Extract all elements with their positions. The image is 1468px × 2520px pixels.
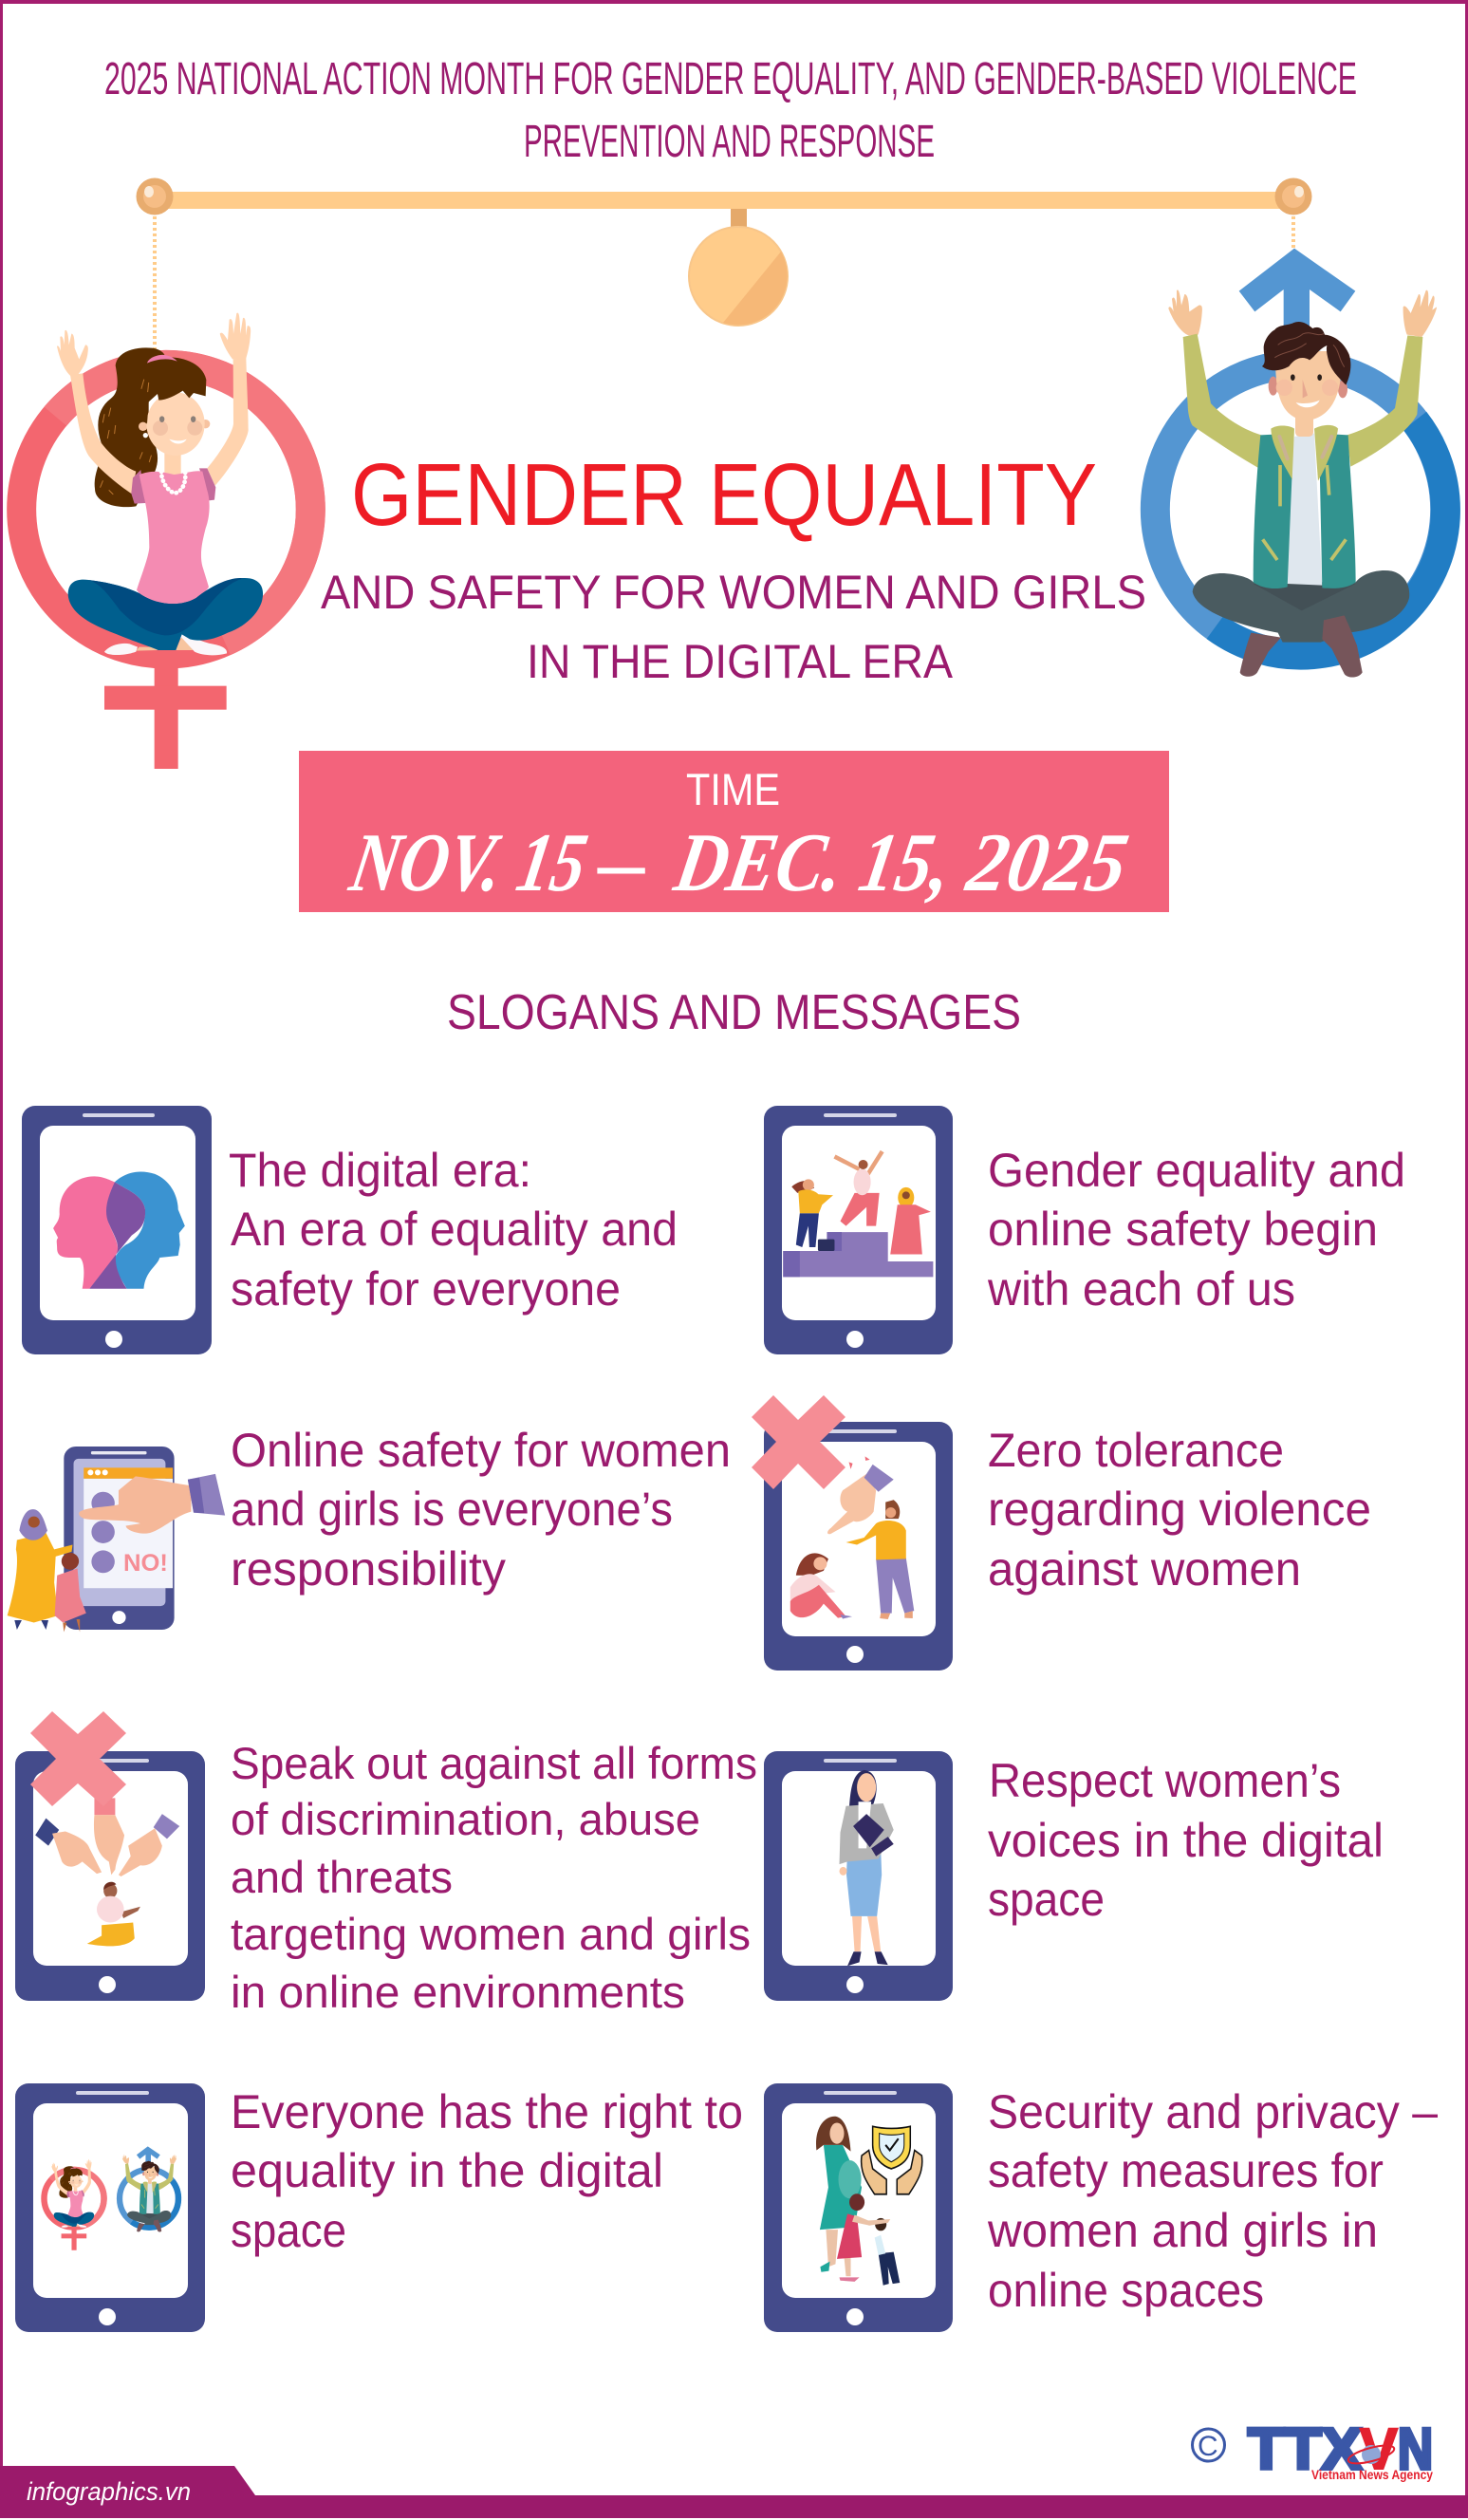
icon: phone with pointing hand and family: NO! (123, 1550, 168, 1577)
slogan text (987, 2085, 1438, 2317)
slogan text: and girls is everyone’s (231, 1483, 673, 1536)
slogan text: regarding violence (988, 1483, 1371, 1536)
icon: tablet with girl and boy (15, 2083, 205, 2332)
icon: cross mark (752, 1395, 845, 1489)
logo: TTXVN: N (1398, 2417, 1433, 2481)
icon: cross mark (30, 1711, 126, 1806)
slogan text: against women (988, 1542, 1301, 1596)
icon: tablet with accusing hand (764, 1422, 953, 1671)
panel: respect women's voices slogan (764, 1751, 1384, 2001)
slogan text: Speak out against all forms (231, 1738, 757, 1788)
slogan text: targeting women and girls (231, 1909, 751, 1959)
slogan text: Online safety for women (231, 1424, 731, 1477)
slogan text: online safety begin (988, 1203, 1378, 1256)
slogan text: Security and privacy – (988, 2085, 1438, 2138)
footer bar (0, 2466, 1468, 2518)
footer bar: infographics.vn (27, 2477, 191, 2506)
date range: – (597, 817, 645, 909)
logo: TTXVN: TTX (1248, 2417, 1362, 2481)
slogan text (231, 1738, 757, 2017)
icon: tablet with two heads (22, 1106, 212, 1354)
slogan text: The digital era: (229, 1144, 531, 1197)
slogan text: women and girls in (987, 2204, 1378, 2257)
slogan text: space (231, 2204, 346, 2257)
icon: phone with pointing hand and family (8, 1447, 225, 1632)
slogan text: Everyone has the right to (231, 2085, 743, 2138)
logo: TTXVN: V (1360, 2417, 1398, 2481)
slogan text: An era of equality and (231, 1203, 678, 1256)
header title (104, 54, 1357, 167)
main title: AND SAFETY FOR WOMEN AND GIRLS (321, 566, 1146, 619)
main title (321, 445, 1146, 688)
logo: TTXVN: C (1198, 2431, 1218, 2462)
header title: PREVENTION AND RESPONSE (524, 117, 935, 167)
slogan text: responsibility (231, 1542, 506, 1596)
slogan text: of discrimination, abuse (231, 1794, 700, 1844)
panel: digital era slogan (22, 1106, 678, 1354)
slogan text: equality in the digital (231, 2144, 663, 2197)
date range: 2025 (959, 817, 1135, 909)
time banner: TIME (686, 764, 780, 814)
illustration: girl on female symbol (22, 313, 310, 769)
date range (344, 817, 1135, 909)
slogan text: space (988, 1873, 1105, 1926)
panel: security and privacy slogan (764, 2083, 1438, 2332)
slogan text: online spaces (988, 2264, 1264, 2317)
date range: DEC. 15, (668, 817, 959, 909)
panel: everyone's responsibility slogan (8, 1424, 731, 1632)
main title: IN THE DIGITAL ERA (527, 635, 954, 688)
panel: right to equality slogan (15, 2083, 743, 2332)
time banner (299, 751, 1169, 912)
section heading: SLOGANS AND MESSAGES (447, 985, 1021, 1040)
slogan text (231, 2085, 743, 2257)
slogan text: and threats (231, 1852, 453, 1902)
slogan text (988, 1424, 1371, 1596)
slogan text: safety for everyone (231, 1262, 621, 1316)
slogan text: safety measures for (988, 2144, 1384, 2197)
slogan text (988, 1754, 1384, 1926)
panel: speak out slogan (15, 1711, 757, 2017)
illustration: boy on male symbol (1155, 249, 1445, 678)
icon: tablet with family and shield (764, 2083, 953, 2332)
panel: zero tolerance slogan (752, 1395, 1371, 1671)
slogan text: Zero tolerance (988, 1424, 1284, 1477)
icon: tablet with businesswoman (764, 1751, 953, 2001)
slogan text (229, 1144, 678, 1316)
logo: TTXVN (1192, 2417, 1433, 2482)
slogan text: Gender equality and (988, 1144, 1405, 1197)
slogan text (231, 1424, 731, 1596)
icon: tablet with pointing hands (15, 1751, 205, 2001)
slogan text: with each of us (987, 1262, 1295, 1316)
slogan text: Respect women’s (989, 1754, 1341, 1807)
slogan text: in online environments (231, 1967, 685, 2017)
balance scale (137, 178, 1311, 353)
slogan text (987, 1144, 1405, 1316)
panel: begin with each of us slogan (764, 1106, 1405, 1354)
logo: TTXVN: Vietnam News Agency (1311, 2468, 1433, 2482)
main title: GENDER EQUALITY (351, 445, 1097, 544)
slogan text: voices in the digital (988, 1814, 1384, 1867)
date range: NOV. 15 (344, 817, 594, 909)
icon: tablet with people on steps (764, 1106, 953, 1354)
